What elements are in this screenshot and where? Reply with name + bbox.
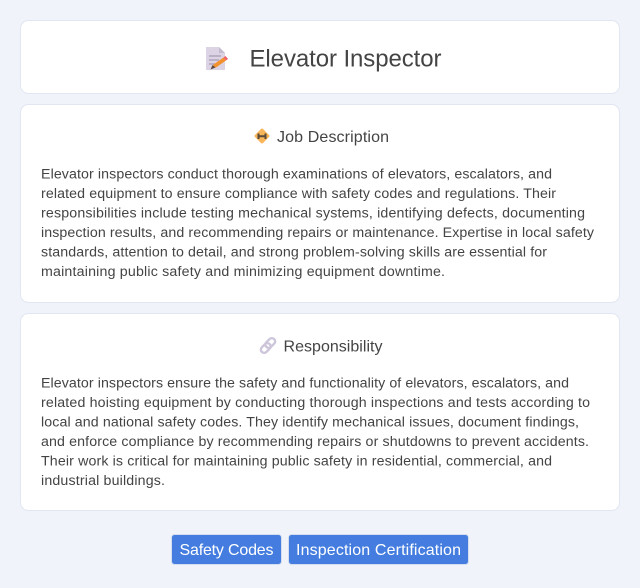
panel: job description: [20, 104, 620, 302]
icon: construction sign: [254, 128, 270, 144]
tag: safety codes: [172, 534, 282, 564]
text block: job description: [41, 167, 595, 280]
text block: responsibility: and enforce compliance by recommending repairs or shutdowns to prevent accidents.: [41, 434, 589, 450]
text block: job description: inspection results, and recommending repairs or maintenance. Expertise in local safety: [41, 225, 595, 241]
text block: job description: Elevator inspectors conduct thorough examinations of elevators, escalators, and: [41, 167, 552, 183]
text block: job description: standards, attention to detail, and strong problem-solving skills are essential for: [41, 245, 547, 261]
heading: job description: Job Description: [277, 129, 389, 146]
icon: link: [260, 337, 276, 354]
panel: responsibility: [20, 314, 620, 510]
tag: inspection certification: Inspection Certification: [296, 542, 461, 559]
text block: job description: responsibilities include testing mechanical systems, identifying defects, documenting: [41, 206, 585, 222]
text block: responsibility: industrial buildings.: [41, 473, 165, 489]
text block: job description: related equipment to ensure compliance with safety codes and regulations. Their: [41, 186, 556, 202]
text block: responsibility: Elevator inspectors ensure the safety and functionality of elevators, escalators, and: [41, 376, 569, 392]
text block: job description: maintaining public safety and minimizing equipment downtime.: [41, 264, 445, 280]
text block: responsibility: [41, 376, 590, 489]
heading: responsibility: Responsibility: [284, 338, 382, 355]
text block: responsibility: related hoisting equipment by conducting thorough inspections and tests according to: [41, 395, 590, 411]
text block: responsibility: local and national safety codes. They identify mechanical issues, document findings,: [41, 415, 579, 431]
text block: responsibility: Their work is critical for maintaining public safety in residential, commercial, and: [41, 454, 552, 470]
tag: safety codes: Safety Codes: [180, 542, 274, 559]
panel: title: [20, 20, 620, 94]
title text: Elevator Inspector: [250, 46, 442, 73]
icon: document with pencil: [206, 47, 228, 70]
tag: inspection certification: [288, 534, 468, 564]
